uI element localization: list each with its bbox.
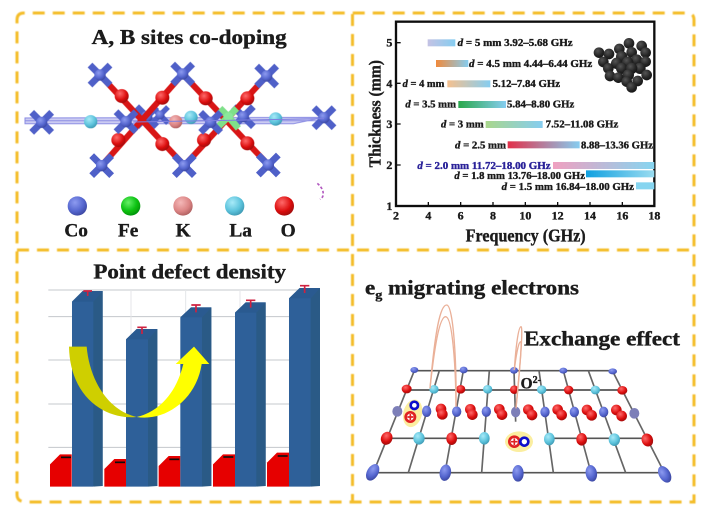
label: O2-: O xyxy=(521,375,533,392)
heading: Point defect density: Point defect density xyxy=(93,262,287,284)
inset: dark microspheres xyxy=(594,38,652,93)
legend: atoms: La xyxy=(229,220,252,241)
crystal structure xyxy=(25,64,334,176)
legend: atoms: K xyxy=(176,220,191,241)
bar labels: d = 4 mm xyxy=(403,79,445,90)
legend: atoms: Fe xyxy=(118,220,139,241)
migration arcs xyxy=(430,305,522,408)
x axis labels: 16 xyxy=(616,208,628,222)
bars xyxy=(428,39,654,189)
y axis labels xyxy=(365,36,392,213)
x axis labels: 2 xyxy=(393,208,399,222)
bar labels: d = 1.8 mm 13.76–18.00 GHz xyxy=(454,171,585,182)
bar labels: d = 2.5 mm xyxy=(455,140,506,151)
x axis labels xyxy=(393,208,660,247)
heading: eg migrating electrons: e xyxy=(365,277,374,299)
bar labels: 5.12–7.84 GHz xyxy=(493,79,560,90)
panel: A, B sites co-doping xyxy=(25,27,334,241)
x axis labels: 12 xyxy=(552,208,564,222)
y axis labels: 5 xyxy=(386,36,392,50)
bar labels: d = 1.5 mm 16.84–18.00 GHz xyxy=(502,182,634,193)
panel: eg migrating electrons xyxy=(363,277,680,485)
plot frame and ticks xyxy=(396,22,654,206)
label: Exchange effect: Exchange effect xyxy=(524,329,680,351)
bar labels: d = 4.5 mm 4.44–6.44 GHz xyxy=(469,59,593,70)
x axis labels: 14 xyxy=(584,208,596,222)
x axis labels: 8 xyxy=(490,208,496,222)
lattice grid xyxy=(373,371,665,473)
y axis labels: 1 xyxy=(386,199,392,213)
heading: eg migrating electrons: g xyxy=(375,288,383,302)
heading: eg migrating electrons: migrating electrons xyxy=(382,277,579,299)
panel: thickness vs frequency chart xyxy=(365,22,660,247)
gridlines xyxy=(48,290,320,447)
atoms: lattice xyxy=(363,367,674,485)
legend: atoms: O xyxy=(281,220,296,241)
bar labels: d = 3.5 mm xyxy=(405,100,456,111)
heading: A, B sites co-doping: A, B sites co-doping xyxy=(92,27,287,49)
y axis labels: 2 xyxy=(386,158,392,172)
bar labels: 8.88–13.36 GHz xyxy=(581,140,653,151)
legend: atoms xyxy=(64,196,296,241)
x axis labels: 4 xyxy=(425,208,431,222)
arrow: curved yellow xyxy=(69,347,209,418)
bar labels: d = 5 mm 3.92–5.68 GHz xyxy=(458,38,573,49)
x axis labels: Frequency (GHz) xyxy=(466,226,586,247)
glow: charge pair, left xyxy=(400,397,425,429)
vertical gridlines xyxy=(131,290,240,487)
bar labels: d = 2.0 mm 11.72–18.00 GHz xyxy=(417,161,551,172)
x axis labels: 10 xyxy=(519,208,531,222)
legend: atoms: Co xyxy=(64,220,88,241)
bar labels: 5.84–8.80 GHz xyxy=(507,100,575,111)
x axis labels: 6 xyxy=(458,208,464,222)
x axis labels: 18 xyxy=(648,208,660,222)
bar chart xyxy=(50,286,320,487)
glow: charge pair, centre xyxy=(505,431,533,452)
bar labels: d = 3 mm xyxy=(441,120,484,131)
bar labels xyxy=(403,38,653,193)
panel: point defect density xyxy=(48,262,320,487)
y axis labels: Thickness (mm) xyxy=(365,60,384,167)
y axis labels: 4 xyxy=(386,76,392,90)
y axis labels: 3 xyxy=(386,117,392,131)
label: O2-: 2- xyxy=(533,375,541,386)
stray mark xyxy=(317,183,323,199)
charge symbols xyxy=(406,402,528,447)
bar labels: 7.52–11.08 GHz xyxy=(546,120,619,131)
